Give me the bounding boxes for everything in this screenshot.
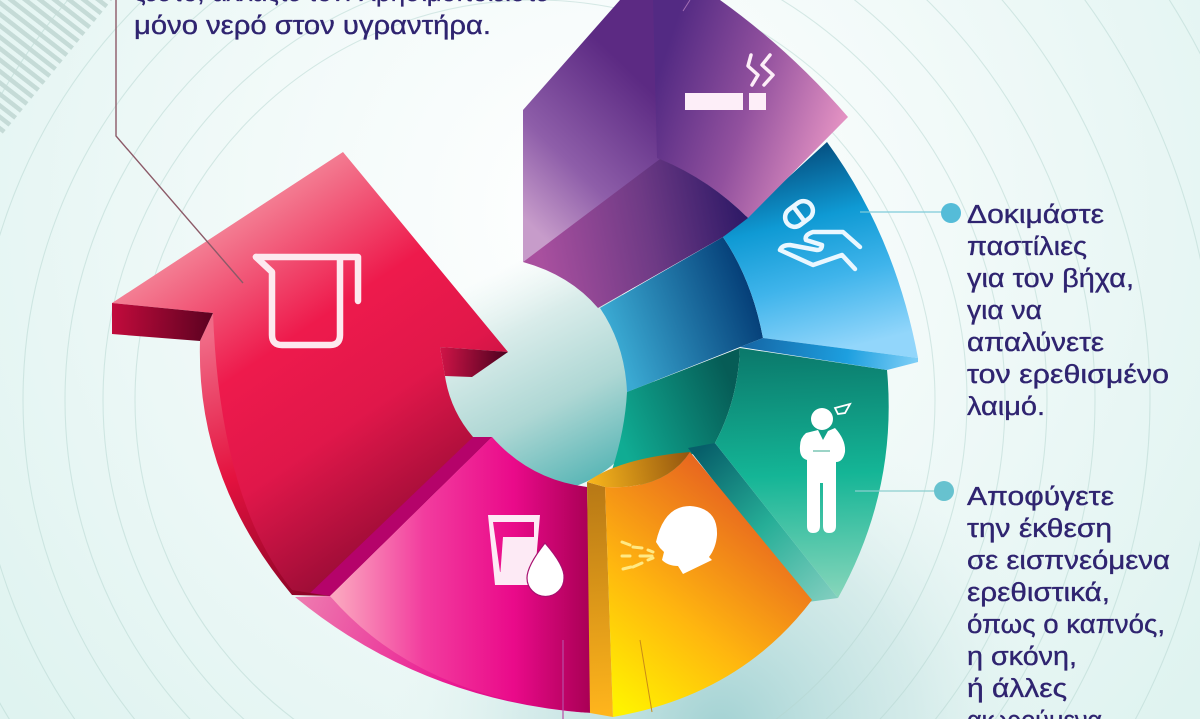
arrow right underside xyxy=(440,347,508,377)
segment: green xyxy=(612,348,936,602)
callout line: green xyxy=(855,490,936,492)
icon: glass and water drop xyxy=(488,515,564,596)
text: lozenges advice xyxy=(967,201,1169,421)
text: avoid irritants advice: όπως ο καπνός, xyxy=(967,611,1165,639)
callout line and text: humidifier: μόνο νερό στον υγραντήρα. xyxy=(134,12,491,40)
text: avoid irritants advice: ή άλλες xyxy=(967,675,1067,703)
text: lozenges advice: τον ερεθισμένο xyxy=(967,361,1169,389)
text: avoid irritants advice: σε εισπνεόμενα xyxy=(967,547,1170,575)
text: avoid irritants advice: ερεθιστικά, xyxy=(967,579,1110,607)
icon: pill on a hand xyxy=(780,197,860,269)
segment: magenta xyxy=(295,437,592,713)
arrow left underside xyxy=(112,303,213,341)
text: lozenges advice: απαλύνετε xyxy=(967,329,1104,357)
segment: purple xyxy=(523,0,848,308)
segment: blue xyxy=(600,142,944,392)
text: lozenges advice: για να xyxy=(967,297,1042,325)
callout dot: teal xyxy=(934,481,954,501)
text: lozenges advice: Δοκιμάστε xyxy=(967,201,1104,229)
callout line and text: humidifier xyxy=(116,0,548,283)
text: avoid irritants advice: Αποφύγετε xyxy=(967,483,1114,511)
icon: measuring jug xyxy=(256,257,358,345)
centre circle of the wheel xyxy=(418,257,654,493)
text: lozenges advice: λαιμό. xyxy=(967,393,1045,421)
text: lozenges advice: παστίλιες xyxy=(967,233,1087,261)
icon: person with smoke xyxy=(800,404,850,533)
text: avoid irritants advice xyxy=(967,483,1170,719)
text: avoid irritants advice: την έκθεση xyxy=(967,515,1112,543)
text: lozenges advice: για τον βήχα, xyxy=(967,265,1134,293)
icon: coughing head xyxy=(622,506,717,574)
callout line: blue xyxy=(860,211,944,213)
segment: orange xyxy=(587,452,812,717)
callout line: magenta xyxy=(562,640,564,719)
text: avoid irritants advice: η σκόνη, xyxy=(967,643,1077,671)
segment: red arrow xyxy=(112,152,508,596)
callout dot: blue xyxy=(941,203,961,223)
icon: cigarette with smoke xyxy=(685,55,773,110)
